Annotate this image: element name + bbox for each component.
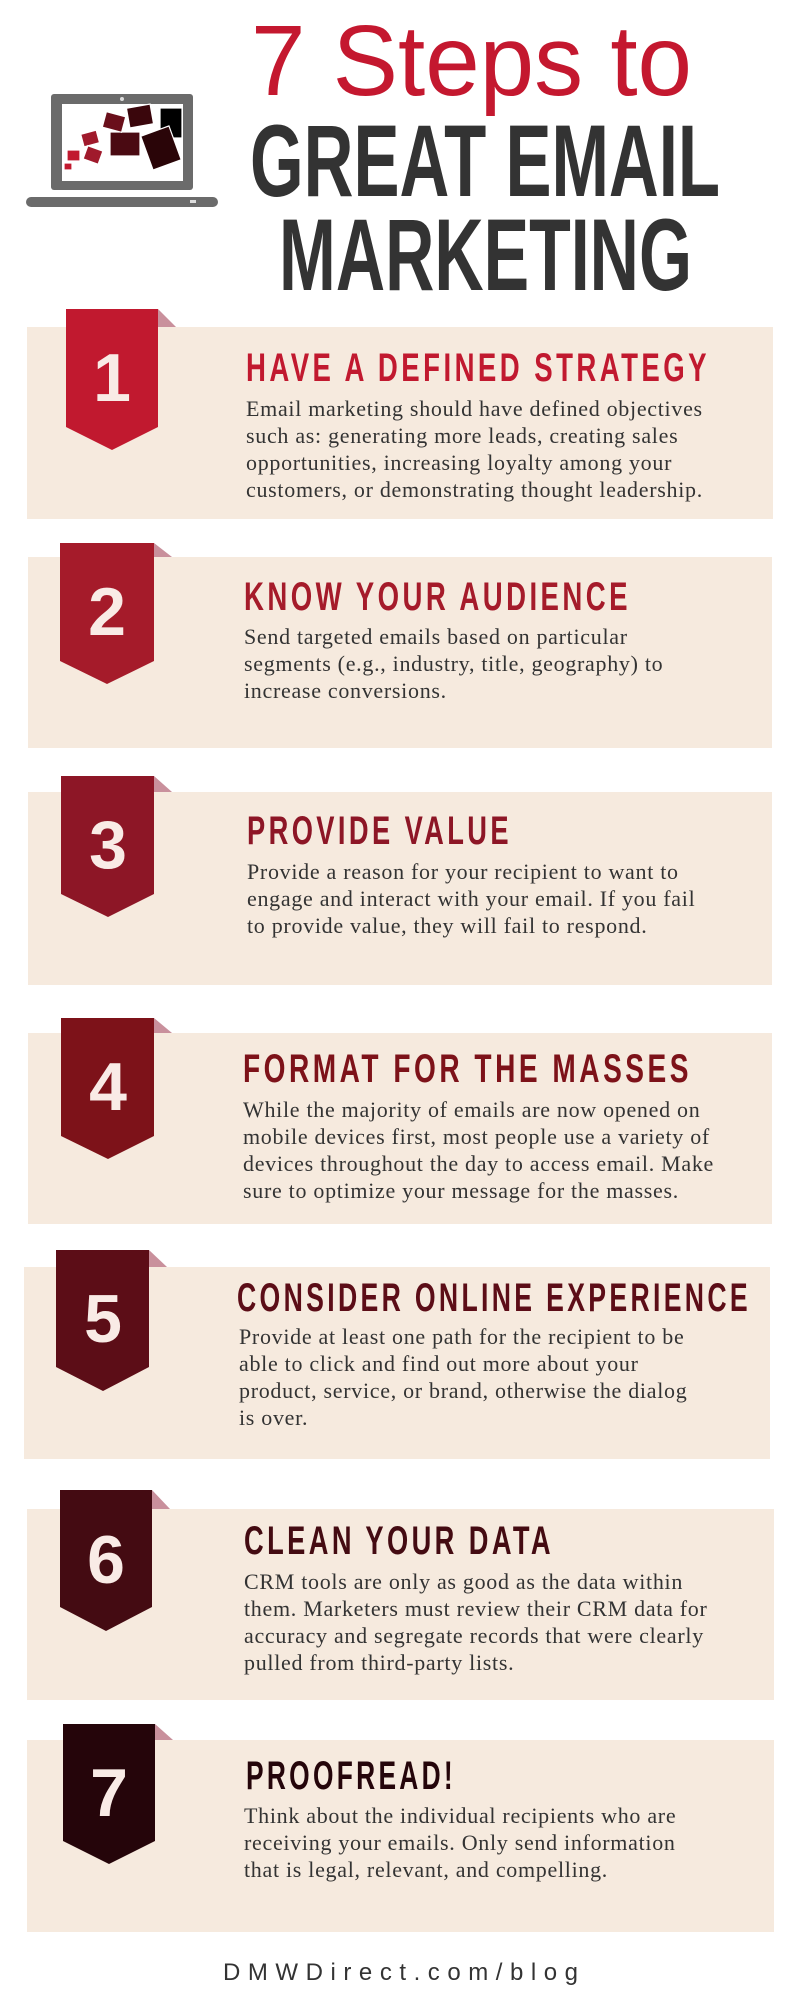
ribbon 2 [60,543,172,684]
text 1: such as: generating more leads, creating sales [246,423,678,448]
ribbon 7: 7 [90,1755,128,1831]
heading 3: PROVIDE VALUE [247,809,512,853]
ribbon 5 [56,1250,167,1391]
ribbon 3: 3 [89,807,127,883]
text 4: devices throughout the day to access email. Make [243,1151,714,1176]
panel: step 2 [28,543,772,748]
text 1 [246,396,703,502]
text 2 [244,624,663,703]
text 6 [244,1569,708,1675]
text 5: able to click and find out more about your [239,1351,639,1376]
text 4: sure to optimize your message for the masses. [243,1178,679,1203]
text 5: product, service, or brand, otherwise the dialog [239,1378,687,1403]
text 5 [239,1324,687,1430]
heading 2: KNOW YOUR AUDIENCE [244,575,631,619]
ribbon 1: 1 [93,340,131,416]
text 6: them. Marketers must review their CRM data for [244,1596,708,1621]
text 2: segments (e.g., industry, title, geography) to [244,651,663,676]
panel: step 1 [27,309,773,519]
text 6: pulled from third-party lists. [244,1650,514,1675]
text 4: While the majority of emails are now opened on [243,1097,700,1122]
text 7: that is legal, relevant, and compelling. [244,1857,608,1882]
heading 6: CLEAN YOUR DATA [244,1519,554,1563]
ribbon 4: 4 [89,1049,127,1125]
ribbon 4 [61,1018,172,1159]
title: GREAT EMAIL MARKETING [250,104,720,312]
panel: step 4 [28,1018,772,1224]
ribbon 7 [63,1724,173,1864]
text 3: engage and interact with your email. If you fail [247,886,695,911]
ribbon 5: 5 [84,1281,122,1357]
text 5: is over. [239,1405,308,1430]
heading 7: PROOFREAD! [246,1754,456,1798]
text 2: increase conversions. [244,678,447,703]
text 4 [243,1097,714,1203]
text 1: Email marketing should have defined objectives [246,396,703,421]
panel: step 5 [24,1250,770,1459]
title: 7 Steps to: 7 Steps to [251,5,692,117]
text 7: Think about the individual recipients who are [244,1803,676,1828]
text 2: Send targeted emails based on particular [244,624,628,649]
text 3: Provide a reason for your recipient to want to [247,859,679,884]
text 3 [247,859,695,938]
ribbon 1 [66,309,176,450]
text 6: CRM tools are only as good as the data within [244,1569,683,1594]
ribbon 2: 2 [88,574,126,650]
text 3: to provide value, they will fail to respond. [247,913,647,938]
ribbon 6: 6 [87,1522,125,1598]
text 7: receiving your emails. Only send information [244,1830,676,1855]
text 1: opportunities, increasing loyalty among your [246,450,672,475]
text 5: Provide at least one path for the recipient to be [239,1324,684,1349]
text 4: mobile devices first, most people use a variety of [243,1124,710,1149]
icon: laptop with envelopes [26,94,218,207]
ribbon 3 [61,776,172,917]
panel: step 3 [28,776,772,985]
text 6: accuracy and segregate records that were clearly [244,1623,704,1648]
footer: url: DMWDirect.com/blog [223,1959,578,1986]
ribbon 6 [60,1490,170,1631]
panel: step 6 [27,1490,774,1700]
panel: step 7 [27,1724,774,1932]
text 7 [244,1803,676,1882]
text 1: customers, or demonstrating thought leadership. [246,477,703,502]
